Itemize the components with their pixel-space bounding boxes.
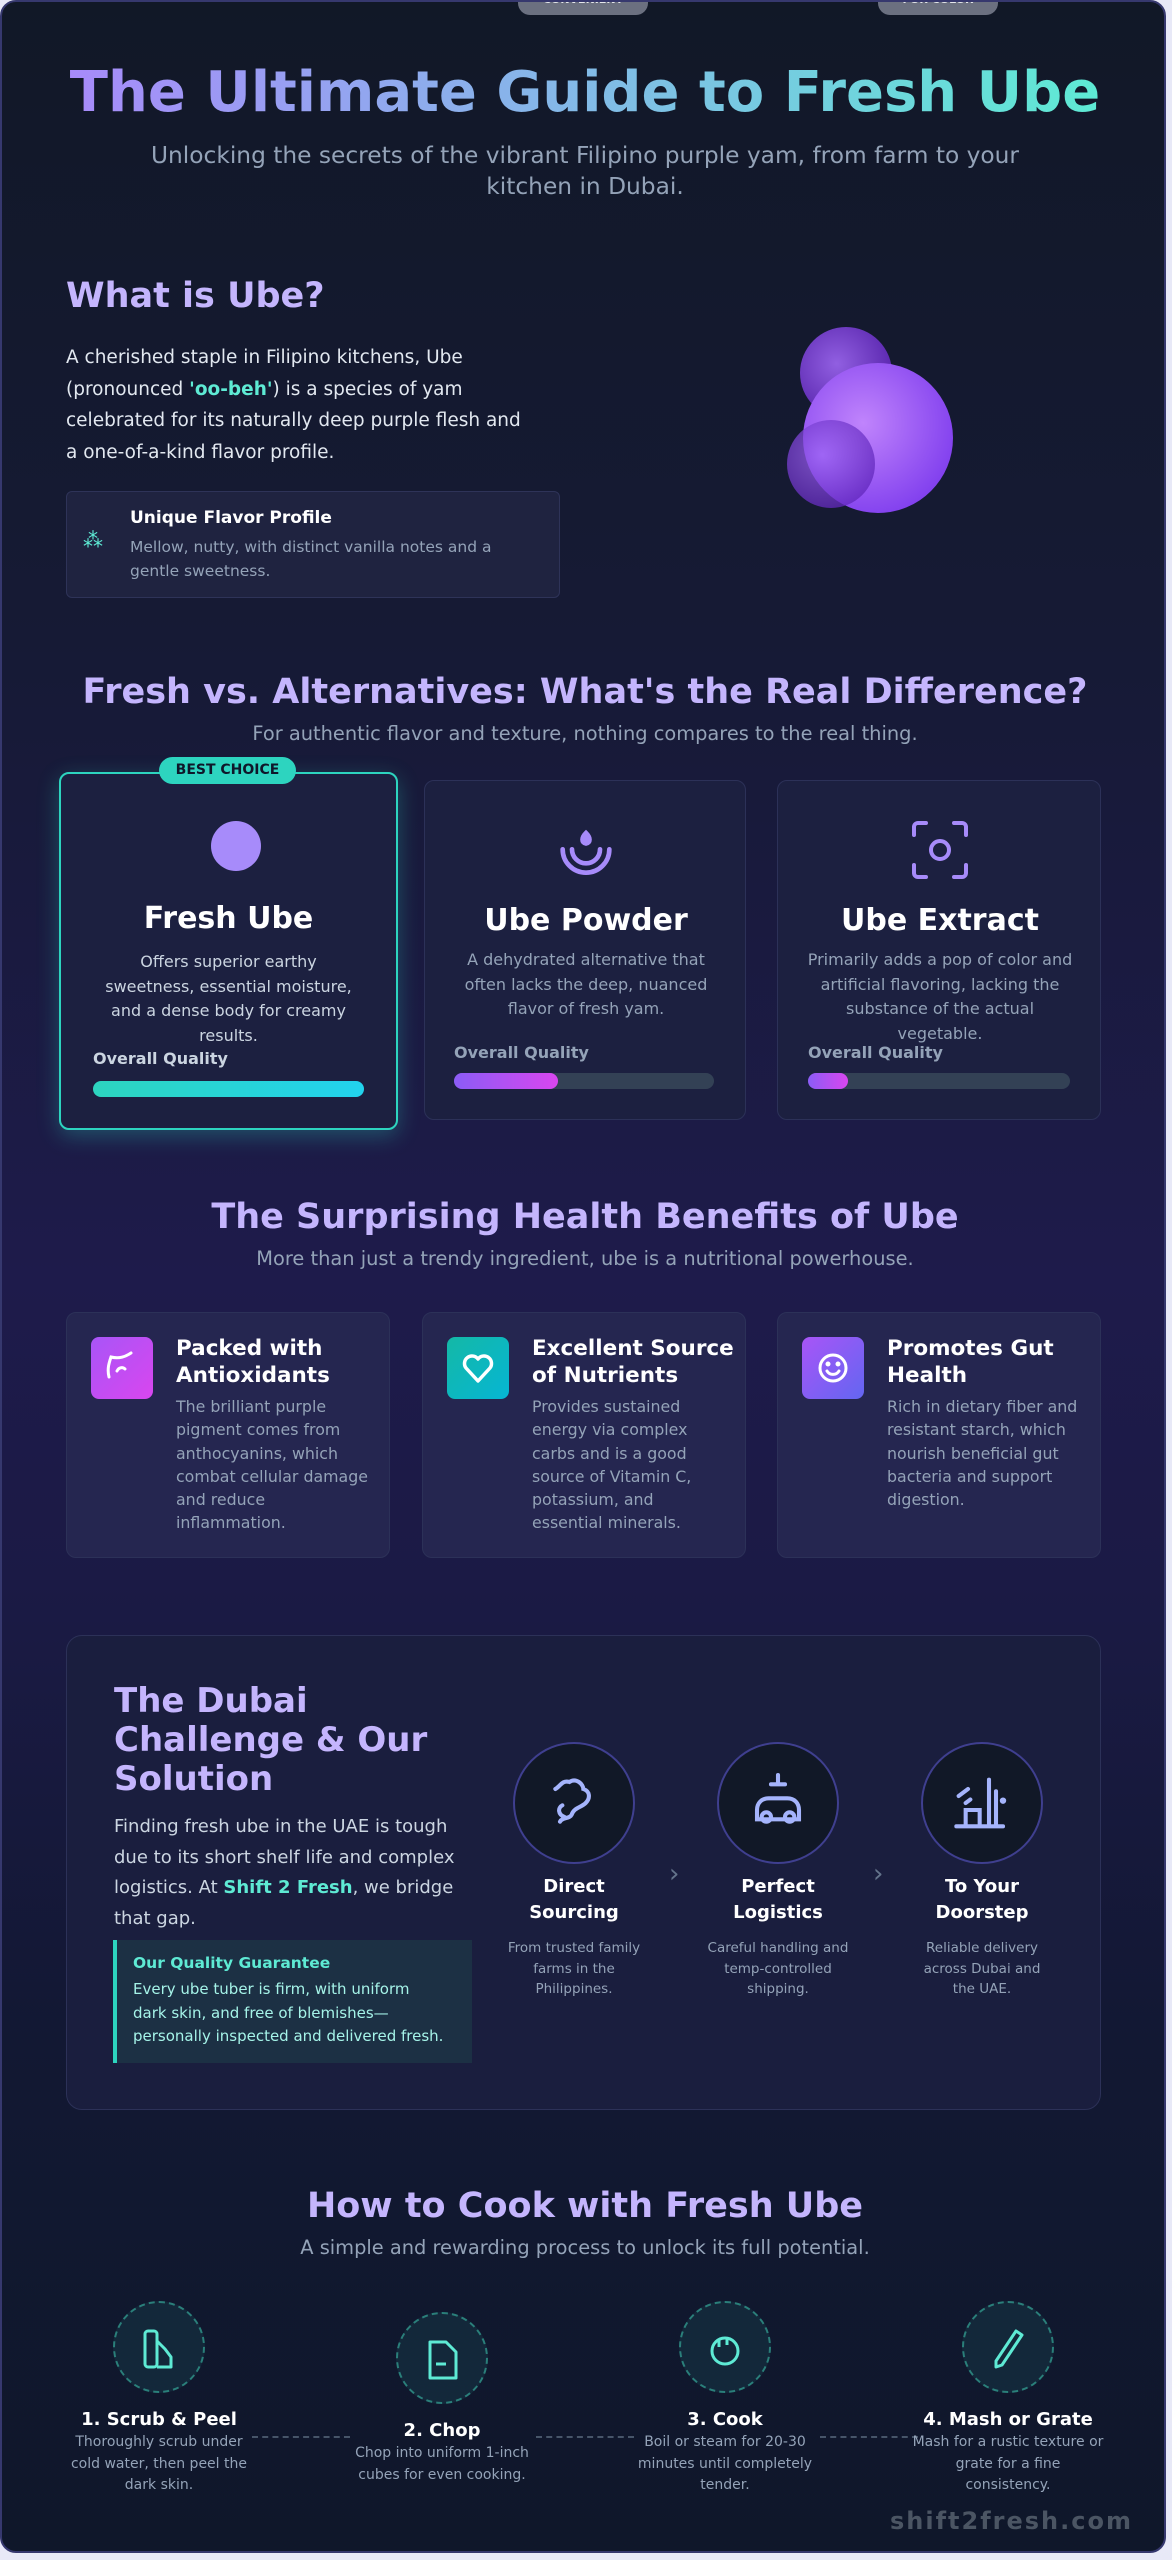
step 1 (71, 2301, 247, 2493)
card: ube extract: Primarily adds a pop of color and artificial flavoring, lacking the substance of the actual vegetable. (808, 950, 1072, 1042)
step 4: Mash for a rustic texture or grate for a fine consistency. (913, 2434, 1103, 2493)
badge: best choice: BEST CHOICE (176, 762, 279, 778)
card: antioxidants (66, 1312, 390, 1558)
card: fresh ube: Overall Quality (93, 1049, 228, 1068)
callout: quality guarantee (113, 1940, 472, 2063)
icon: focus (912, 821, 968, 879)
section subtitle: A simple and rewarding process to unlock its full potential. (300, 2236, 870, 2259)
card: ube extract: Ube Extract (841, 903, 1039, 938)
heading: The Dubai Challenge & Our Solution (114, 1681, 427, 1799)
pill: convenient (518, 0, 648, 15)
step: logistics (708, 1742, 848, 1997)
callout: quality guarantee: dark skin, and free of blemishes— (133, 2004, 389, 2022)
icon: smile (802, 1337, 864, 1399)
paragraph: A cherished staple in Filipino kitchens, Ube (pronounced 'oo-beh') is a species of yam celebrated for its naturally deep purple flesh and a one-of-a-kind flavor profile. (66, 347, 521, 462)
card: gut health: Rich in dietary fiber and resistant starch, which nourish beneficial gut bacteria and support digestion. (887, 1397, 1077, 1509)
step 4 (913, 2301, 1104, 2493)
step 1: Thoroughly scrub under cold water, then peel the dark skin. (71, 2434, 247, 2493)
card: ube powder: Overall Quality (454, 1043, 589, 1062)
section: what is ube (66, 276, 560, 598)
icon: map (513, 1742, 635, 1864)
footer url: shift2fresh.com (890, 2507, 1133, 2535)
step: direct sourcing: Direct (543, 1876, 605, 1897)
step: direct sourcing: Sourcing (529, 1902, 619, 1923)
card: antioxidants: The brilliant purple pigment comes from anthocyanins, which combat cellular damage and reduce inflammation. (176, 1397, 368, 1532)
pill: for color (878, 0, 998, 15)
subtitle: Unlocking the secrets of the vibrant Filipino purple yam, from farm to your kitchen in Dubai. (151, 142, 1019, 200)
card: ube powder (424, 780, 746, 1120)
callout: flavor profile: Unique Flavor Profile (130, 508, 332, 528)
icon: powder (560, 830, 612, 875)
callout: quality guarantee: Every ube tuber is firm, with uniform (133, 1980, 410, 1998)
icon: circle (211, 821, 261, 871)
icon: car (717, 1742, 839, 1864)
icon: city (921, 1742, 1043, 1864)
card: fresh ube (59, 772, 398, 1130)
arrow: › (873, 1859, 883, 1889)
step: doorstep: To Your (945, 1876, 1019, 1897)
card: nutrients (422, 1312, 746, 1558)
card: ube extract: Overall Quality (808, 1043, 943, 1062)
bar: 15% (808, 1073, 1070, 1089)
illustration: ube blob (787, 327, 953, 513)
section heading: fresh vs alternatives: Fresh vs. Alternatives: What's the Real Difference? (83, 672, 1087, 712)
icon: document (396, 2312, 488, 2404)
card: antioxidants: Packed with Antioxidants (176, 1336, 330, 1388)
step: logistics: Perfect (741, 1876, 815, 1897)
callout: quality guarantee: Our Quality Guarantee (133, 1954, 330, 1972)
card: fresh ube: Fresh Ube (144, 901, 313, 936)
section subtitle: For authentic flavor and texture, nothing compares to the real thing. (252, 722, 918, 745)
bar: 40% (454, 1073, 714, 1089)
card: ube powder: Ube Powder (484, 903, 688, 938)
title: The Ultimate Guide to Fresh Ube (70, 60, 1100, 125)
step: direct sourcing: From trusted family farms in the Philippines. (508, 1940, 640, 1997)
step 2 (355, 2312, 529, 2482)
icon: scrub (113, 2301, 205, 2393)
section heading: health benefits: The Surprising Health Benefits of Ube (211, 1197, 959, 1237)
icon: shield (91, 1337, 153, 1399)
step: logistics: Logistics (733, 1902, 823, 1923)
step 1: 1. Scrub & Peel (81, 2409, 237, 2430)
arrow: › (669, 1859, 679, 1889)
icon: sparkles: ⁂ (83, 528, 103, 552)
section heading: how to cook: How to Cook with Fresh Ube (307, 2186, 863, 2226)
icon: heart (447, 1337, 509, 1399)
step: doorstep (921, 1742, 1043, 1997)
card: ube powder: A dehydrated alternative that often lacks the deep, nuanced flavor of fresh yam. (465, 950, 707, 1018)
paragraph: Finding fresh ube in the UAE is tough due to its short shelf life and complex logistics. At Shift 2 Fresh, we bridge that gap. (114, 1816, 454, 1928)
step: direct sourcing (508, 1742, 640, 1997)
icon: pencil (962, 2301, 1054, 2393)
callout: flavor profile: Mellow, nutty, with distinct vanilla notes and a gentle sweetness. (130, 538, 491, 580)
step 3: Boil or steam for 20-30 minutes until completely tender. (638, 2434, 812, 2493)
step 3: 3. Cook (687, 2409, 763, 2430)
step: doorstep: Doorstep (936, 1902, 1028, 1923)
step: doorstep: Reliable delivery across Dubai and the UAE. (924, 1940, 1040, 1997)
badge: best choice (159, 757, 296, 784)
callout: quality guarantee: personally inspected and delivered fresh. (133, 2027, 443, 2045)
card: nutrients: Excellent Source of Nutrients (532, 1336, 734, 1388)
callout: flavor profile (66, 491, 560, 598)
card: gut health: Promotes Gut Health (887, 1336, 1054, 1388)
card: fresh ube: Offers superior earthy sweetness, essential moisture, and a dense body for creamy results. (105, 952, 352, 1044)
card: nutrients: Provides sustained energy via complex carbs and is a good source of Vitamin C, potassium, and essential minerals. (532, 1397, 691, 1532)
panel: dubai challenge (66, 1635, 1101, 2110)
bar: 100% (93, 1081, 364, 1097)
heading: What is Ube? (66, 276, 325, 316)
step 2: 2. Chop (404, 2420, 480, 2441)
step 3 (638, 2301, 812, 2493)
icon: flame pot (679, 2301, 771, 2393)
card: gut health (777, 1312, 1101, 1558)
step 2: Chop into uniform 1-inch cubes for even cooking. (355, 2445, 529, 2482)
section subtitle: More than just a trendy ingredient, ube is a nutritional powerhouse. (256, 1247, 914, 1270)
card: ube extract (777, 780, 1101, 1120)
dashed connectors (252, 2436, 350, 2438)
step 4: 4. Mash or Grate (923, 2409, 1093, 2430)
step: logistics: Careful handling and temp-controlled shipping. (708, 1940, 848, 1997)
